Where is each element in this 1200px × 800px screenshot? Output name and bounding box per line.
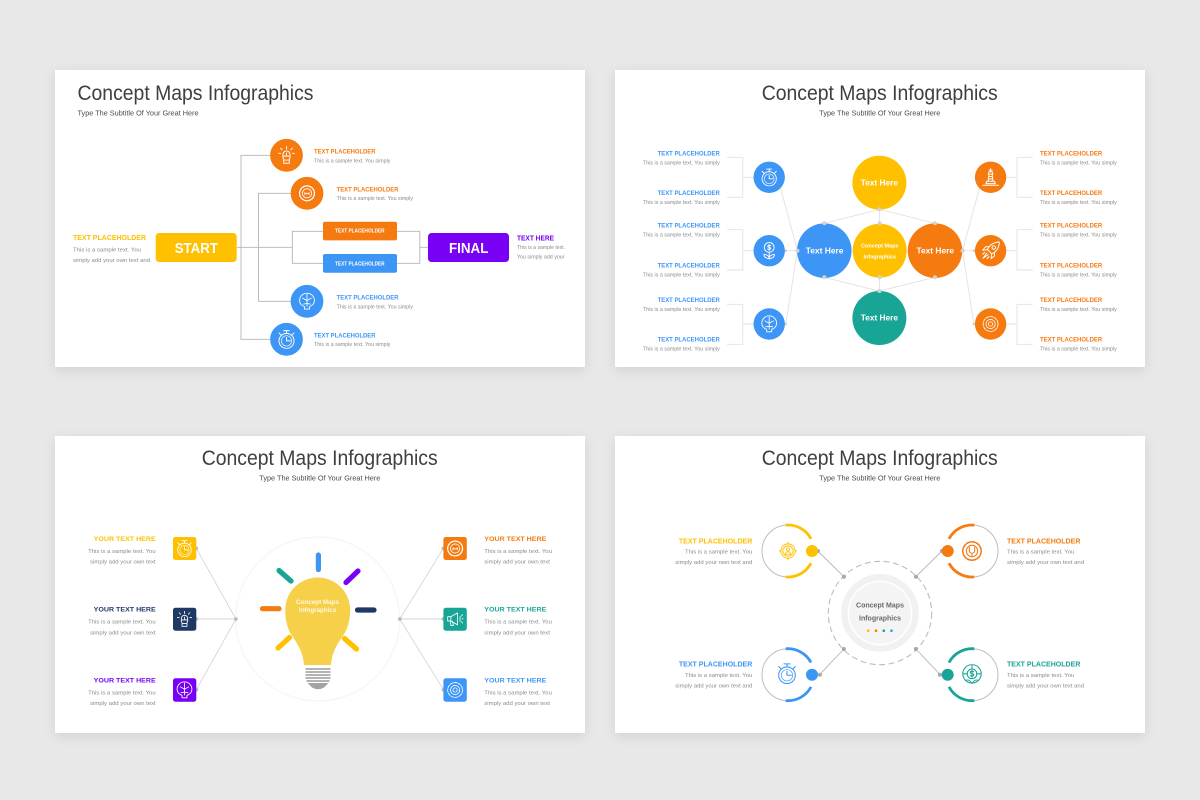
left text blocks: This is a sample text. You simply: [643, 347, 720, 353]
text: item 3: [337, 295, 414, 310]
text: blue: simply add your own text and: [675, 684, 752, 690]
right text blocks: TEXT PLACEHOLDER: [1040, 262, 1102, 269]
title: Concept Maps Infographics: [202, 447, 438, 470]
left text blocks: TEXT PLACEHOLDER: [658, 262, 720, 269]
bulb rays: [262, 555, 374, 649]
text: item 2: TEXT PLACEHOLDER: [337, 186, 399, 193]
left text blocks: This is a sample text. You: [88, 690, 156, 696]
right text blocks: [484, 536, 552, 707]
icon node: idea: [270, 139, 303, 172]
right text blocks: This is a sample text. You: [484, 620, 552, 626]
icon tile: megaphone: [443, 608, 467, 631]
left text blocks: YOUR TEXT HERE: [94, 607, 156, 614]
left description: This is a sample text. You: [73, 247, 141, 253]
right text blocks: This is a sample text. You: [484, 549, 552, 555]
text: teal: TEXT PLACEHOLDER: [1007, 660, 1081, 669]
right text blocks: This is a sample text. You simply: [1040, 200, 1117, 206]
icon node: target: [975, 308, 1006, 340]
icon tile: idea: [173, 608, 196, 631]
central hub: [828, 561, 932, 665]
left text blocks: This is a sample text. You simply: [643, 307, 720, 313]
icon tile: gear: [443, 537, 467, 560]
text: item 1: [314, 149, 391, 164]
circle: bottom: [852, 291, 906, 345]
connector dots: [816, 549, 944, 677]
icon node: rocket: [975, 235, 1006, 266]
text: item 1: TEXT PLACEHOLDER: [314, 149, 376, 156]
left text blocks: This is a sample text. You simply: [643, 232, 720, 238]
light bulb: Concept Maps: [296, 599, 339, 606]
text: yellow: TEXT PLACEHOLDER: [679, 536, 753, 545]
right text blocks: YOUR TEXT HERE: [484, 536, 547, 543]
start box: START: [175, 240, 218, 257]
text: teal: This is a sample text. You: [1007, 673, 1074, 679]
icon node: stopwatch: [754, 162, 785, 193]
right text blocks: This is a sample text. You simply: [1040, 307, 1117, 313]
text: item 3: TEXT PLACEHOLDER: [337, 295, 399, 302]
text: item 3: This is a sample text. You simply: [337, 304, 414, 310]
panel: light bulb concept map: [55, 436, 585, 733]
right text blocks: simply add your own text: [484, 560, 550, 566]
ring node: blue: [762, 649, 818, 701]
central hub: Concept Maps: [856, 600, 904, 609]
left text blocks: TEXT PLACEHOLDER: [658, 223, 720, 230]
subtitle: Type The Subtitle Of Your Great Here: [819, 111, 940, 118]
icon tile: brain: [173, 678, 196, 702]
subtitle: Type The Subtitle Of Your Great Here: [819, 476, 940, 483]
text: yellow: simply add your own text and: [675, 560, 752, 566]
right description: You simply add your: [517, 255, 565, 261]
circle: top: [852, 156, 906, 210]
panel: start to final concept map: [55, 70, 585, 367]
right text blocks: This is a sample text. You: [484, 690, 552, 696]
icon node: stopwatch: [270, 323, 303, 356]
circle: bottom: Text Here: [861, 313, 898, 323]
circle: right: [908, 223, 962, 278]
final box: FINAL: [449, 240, 488, 257]
left description: simply add your own text and: [73, 258, 150, 264]
text: blue: [675, 660, 753, 690]
left text blocks: [643, 151, 720, 353]
right text blocks: simply add your own text: [484, 630, 550, 636]
text: blue: TEXT PLACEHOLDER: [679, 660, 753, 669]
subtitle: Type The Subtitle Of Your Great Here: [259, 476, 380, 483]
left text blocks: TEXT PLACEHOLDER: [658, 297, 720, 304]
right description: This is a sample text.: [517, 245, 565, 251]
icon node: brain: [291, 285, 323, 318]
connector lines: [818, 551, 942, 674]
left text blocks: TEXT PLACEHOLDER: [658, 337, 720, 344]
connector lines: [196, 548, 443, 690]
halo circle: [236, 537, 400, 701]
icon tile: target: [443, 678, 467, 702]
text: orange: simply add your own text and: [1007, 560, 1084, 566]
panel: hub and ring concept map: [615, 436, 1145, 733]
orange box: [323, 222, 397, 240]
orange box: TEXT PLACEHOLDER: [335, 229, 385, 235]
right description: [517, 233, 565, 261]
left text blocks: TEXT PLACEHOLDER: [658, 151, 720, 158]
connector lines: [727, 157, 1033, 344]
subtitle: Type The Subtitle Of Your Great Here: [78, 111, 199, 118]
connector dots: [784, 207, 976, 326]
right text blocks: This is a sample text. You simply: [1040, 272, 1117, 278]
text: item 4: [314, 332, 391, 348]
left text blocks: This is a sample text. You: [88, 549, 156, 555]
left text blocks: simply add your own text: [90, 560, 156, 566]
right text blocks: This is a sample text. You simply: [1040, 232, 1117, 238]
left description: [73, 233, 150, 264]
text: item 2: [337, 186, 414, 202]
text: yellow: This is a sample text. You: [685, 549, 752, 555]
text: orange: This is a sample text. You: [1007, 549, 1074, 555]
right text blocks: TEXT PLACEHOLDER: [1040, 190, 1102, 197]
title: Concept Maps Infographics: [78, 82, 314, 105]
circle: center: Infographics: [864, 254, 896, 260]
right text blocks: [1040, 151, 1117, 353]
circle: center: Concept Maps: [861, 244, 899, 250]
left text blocks: TEXT PLACEHOLDER: [658, 190, 720, 197]
icon tile: stopwatch: [173, 537, 196, 560]
final box: [428, 233, 509, 262]
title: Concept Maps Infographics: [762, 82, 998, 105]
ring node: yellow: [762, 525, 818, 577]
text: item 4: TEXT PLACEHOLDER: [314, 332, 376, 339]
text: item 2: This is a sample text. You simply: [337, 196, 414, 202]
right text blocks: TEXT PLACEHOLDER: [1040, 297, 1102, 304]
title: Concept Maps Infographics: [762, 447, 998, 470]
left text blocks: YOUR TEXT HERE: [94, 677, 156, 684]
connector lines: [237, 155, 428, 339]
text: blue: This is a sample text. You: [685, 673, 752, 679]
right text blocks: YOUR TEXT HERE: [484, 607, 547, 614]
text: orange: TEXT PLACEHOLDER: [1007, 536, 1081, 545]
start box: [156, 233, 237, 262]
icon node: gear: [291, 177, 323, 210]
light bulb: Infographics: [299, 607, 337, 614]
right text blocks: TEXT PLACEHOLDER: [1040, 151, 1102, 158]
circle: left: [797, 223, 852, 278]
panel: circle cluster concept map: [615, 70, 1145, 367]
connector dots: [194, 546, 445, 692]
circle: top: Text Here: [861, 178, 898, 188]
left text blocks: simply add your own text: [90, 630, 156, 636]
right text blocks: This is a sample text. You simply: [1040, 347, 1117, 353]
text: orange: [1007, 536, 1084, 566]
text: yellow: [675, 536, 753, 566]
right text blocks: TEXT PLACEHOLDER: [1040, 337, 1102, 344]
circle: center: [853, 224, 907, 278]
text: teal: simply add your own text and: [1007, 684, 1084, 690]
left text blocks: This is a sample text. You simply: [643, 272, 720, 278]
icon node: brain: [754, 308, 785, 340]
light bulb: [285, 578, 350, 689]
text: item 4: This is a sample text. You simply: [314, 342, 391, 348]
left text blocks: YOUR TEXT HERE: [94, 536, 156, 543]
right text blocks: This is a sample text. You simply: [1040, 160, 1117, 166]
left text blocks: This is a sample text. You simply: [643, 160, 720, 166]
blue box: [323, 254, 397, 273]
icon node: money plant: [754, 235, 785, 266]
left text blocks: This is a sample text. You simply: [643, 200, 720, 206]
icon node: chess tower: [975, 162, 1006, 193]
blue box: TEXT PLACEHOLDER: [335, 261, 385, 267]
text: item 1: This is a sample text. You simply: [314, 158, 391, 164]
right description: TEXT HERE: [517, 233, 554, 242]
left description: TEXT PLACEHOLDER: [73, 233, 146, 242]
text: teal: [1007, 660, 1084, 690]
circle: left: Text Here: [806, 246, 844, 256]
right text blocks: TEXT PLACEHOLDER: [1040, 223, 1102, 230]
right text blocks: simply add your own text: [484, 701, 550, 707]
left text blocks: This is a sample text. You: [88, 620, 156, 626]
left text blocks: [88, 536, 156, 707]
left text blocks: simply add your own text: [90, 701, 156, 707]
ring node: teal: [942, 649, 998, 701]
central hub: Infographics: [859, 614, 901, 623]
ring node: orange: [942, 525, 998, 577]
circle: right: Text Here: [916, 246, 954, 256]
right text blocks: YOUR TEXT HERE: [484, 677, 547, 684]
